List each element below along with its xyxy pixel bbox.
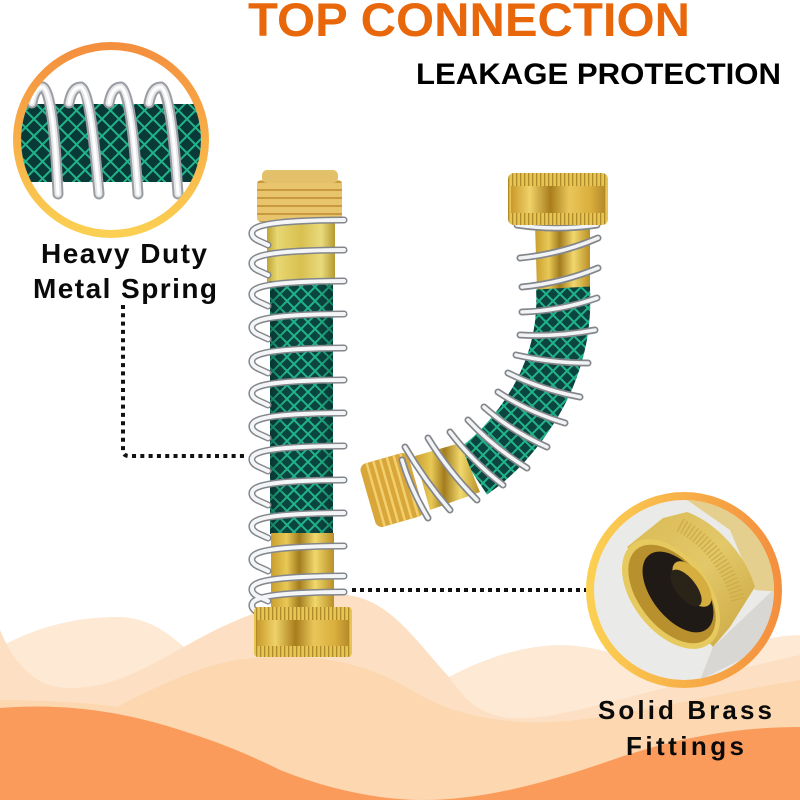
yellow hex brass xyxy=(267,222,335,282)
label: solid brass fittings: Fittings xyxy=(626,731,744,761)
dotted leader: fittings xyxy=(352,588,586,592)
brass neck xyxy=(535,224,590,290)
label: heavy duty metal spring xyxy=(33,238,217,304)
steel spring, bent xyxy=(402,225,598,518)
dotted leader: spring xyxy=(123,305,246,456)
male thread fitting xyxy=(257,170,342,222)
callout: metal spring inset xyxy=(15,46,205,234)
label: heavy duty metal spring: Heavy Duty xyxy=(41,238,207,269)
steel spring xyxy=(252,220,344,617)
nut mouth xyxy=(622,540,720,649)
bent hose connector xyxy=(359,173,608,529)
angled brass collar xyxy=(415,443,480,510)
label: solid brass fittings xyxy=(598,695,772,761)
top swivel nut xyxy=(508,173,608,225)
label: solid brass fittings: Solid Brass xyxy=(598,695,772,725)
label: heavy duty metal spring: Metal Spring xyxy=(33,273,217,304)
brass back body xyxy=(687,500,780,592)
knurled band xyxy=(680,525,738,600)
floor shadow xyxy=(700,592,774,678)
straight hose connector xyxy=(252,170,352,657)
lower brass collar xyxy=(271,533,334,608)
callout: solid brass inset xyxy=(590,496,780,684)
angled male thread xyxy=(359,451,425,529)
subtitle: LEAKAGE PROTECTION xyxy=(416,58,781,91)
green bent hose xyxy=(472,288,563,472)
nut body xyxy=(627,512,755,647)
green mesh hose xyxy=(270,281,333,534)
wave background xyxy=(0,595,800,800)
female swivel nut xyxy=(254,607,352,657)
